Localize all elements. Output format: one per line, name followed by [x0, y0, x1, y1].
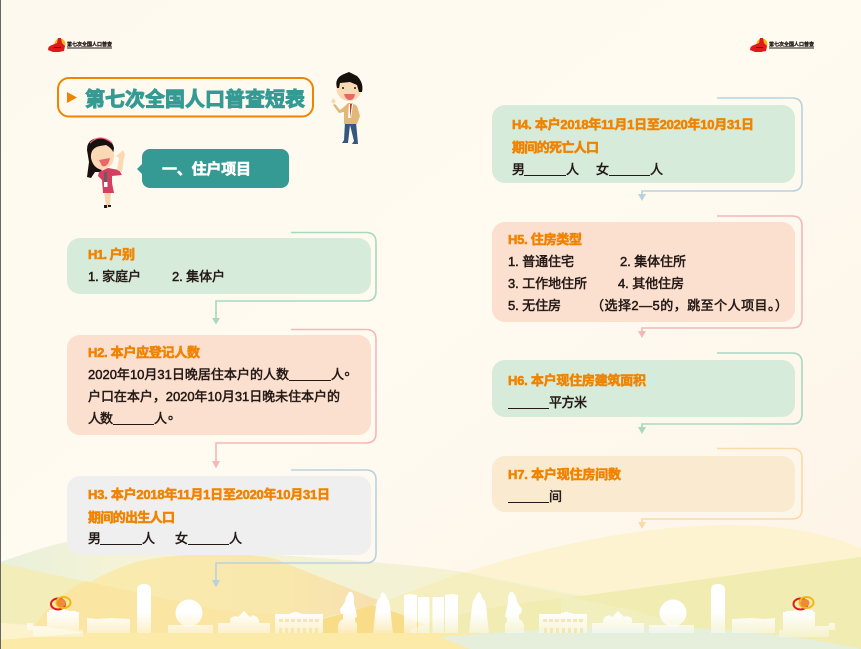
panel: H2 — [67, 330, 376, 468]
emblem: bottom left — [51, 597, 70, 610]
H6 text: 平方米 — [549, 395, 587, 410]
H5 text: 5. 无住房 — [508, 298, 561, 313]
H2 text: 。 — [164, 411, 177, 426]
H2 text: H2. 本户应登记人数 — [88, 345, 200, 360]
H3 text — [88, 487, 330, 546]
arrow: H5 connector — [638, 216, 802, 338]
H2 text: 2020年10月31日晚居住本户的人数 — [88, 367, 289, 382]
H2 text — [88, 345, 354, 426]
H3 text: 女 — [175, 531, 188, 546]
icon: heading pointer — [137, 164, 142, 174]
H6 text: H6. 本户现住房建筑面积 — [508, 373, 646, 388]
H6 text — [508, 373, 646, 410]
H7 text: H7. 本户现住房间数 — [508, 467, 621, 482]
city skyline: left — [27, 584, 430, 637]
H5 text: （选择2—5的，跳至个人项目。） — [591, 298, 788, 313]
arrow: H3 connector — [212, 470, 376, 588]
H3 text: 男 — [88, 531, 101, 546]
H5 text: 3. 工作地住所 — [508, 276, 587, 291]
logo: top left: 第七次全国人口普查 — [67, 41, 112, 48]
arrow: H6 connector — [638, 353, 802, 434]
logo: top right — [750, 38, 814, 52]
H1 text: H1. 户别 — [88, 247, 135, 262]
icon: woman character — [87, 138, 125, 208]
arrow: H1 connector — [212, 232, 376, 324]
panel: H4 — [492, 98, 802, 201]
emblem: bottom right — [794, 597, 814, 610]
H4 text: 期间的死亡人口 — [512, 140, 599, 155]
city skyline: right — [432, 584, 835, 637]
H7 text — [508, 467, 621, 504]
H5 text: 1. 普通住宅 — [508, 254, 574, 269]
title: 第七次全国人口普查短表 — [85, 87, 305, 111]
H5 text: 4. 其他住房 — [618, 276, 684, 291]
H3 text: 人 — [142, 531, 155, 546]
H2 text: 户口在本户，2020年10月31日晚未住本户的 — [88, 389, 340, 404]
H2 text: 人数 — [88, 411, 113, 426]
H4 text: H4. 本户2018年11月1日至2020年10月31日 — [512, 117, 754, 132]
H2 text: 。 — [340, 367, 354, 382]
icon: title triangle marker — [67, 92, 77, 103]
heading text: 一、住户项目 — [162, 160, 251, 178]
H5 text — [508, 232, 788, 313]
icon: man character — [331, 72, 362, 144]
H7 text: 间 — [549, 489, 562, 504]
arrow: H2 connector — [212, 330, 376, 468]
H5 text: H5. 住房类型 — [508, 232, 582, 247]
H3 text: 期间的出生人口 — [88, 510, 175, 525]
H4 text: 人 — [566, 162, 579, 177]
H2 text: 人 — [331, 367, 344, 382]
title banner — [58, 78, 313, 116]
H1 text — [88, 247, 225, 284]
panel: H5 — [492, 216, 802, 338]
arrow: H7 connector — [638, 448, 802, 529]
panel: H3 — [67, 470, 376, 588]
H5 text: 2. 集体住所 — [620, 254, 686, 269]
H4 text: 女 — [596, 162, 609, 177]
H1 text: 2. 集体户 — [172, 269, 225, 284]
H4 text: 人 — [650, 162, 663, 177]
panel: H1 — [67, 232, 376, 324]
arrow: H4 connector — [638, 98, 802, 201]
H3 text: 人 — [229, 531, 242, 546]
H2 text: 人 — [154, 411, 167, 426]
H4 text — [512, 117, 754, 177]
panel: H7 — [492, 448, 802, 529]
section heading — [137, 149, 289, 188]
logo: top left — [48, 38, 112, 52]
H4 text: 男 — [512, 162, 525, 177]
panel: H6 — [492, 353, 802, 434]
background hills — [0, 525, 861, 649]
H3 text: H3. 本户2018年11月1日至2020年10月31日 — [88, 487, 330, 502]
logo: top right: 第七次全国人口普查 — [769, 41, 814, 48]
H1 text: 1. 家庭户 — [88, 269, 141, 284]
